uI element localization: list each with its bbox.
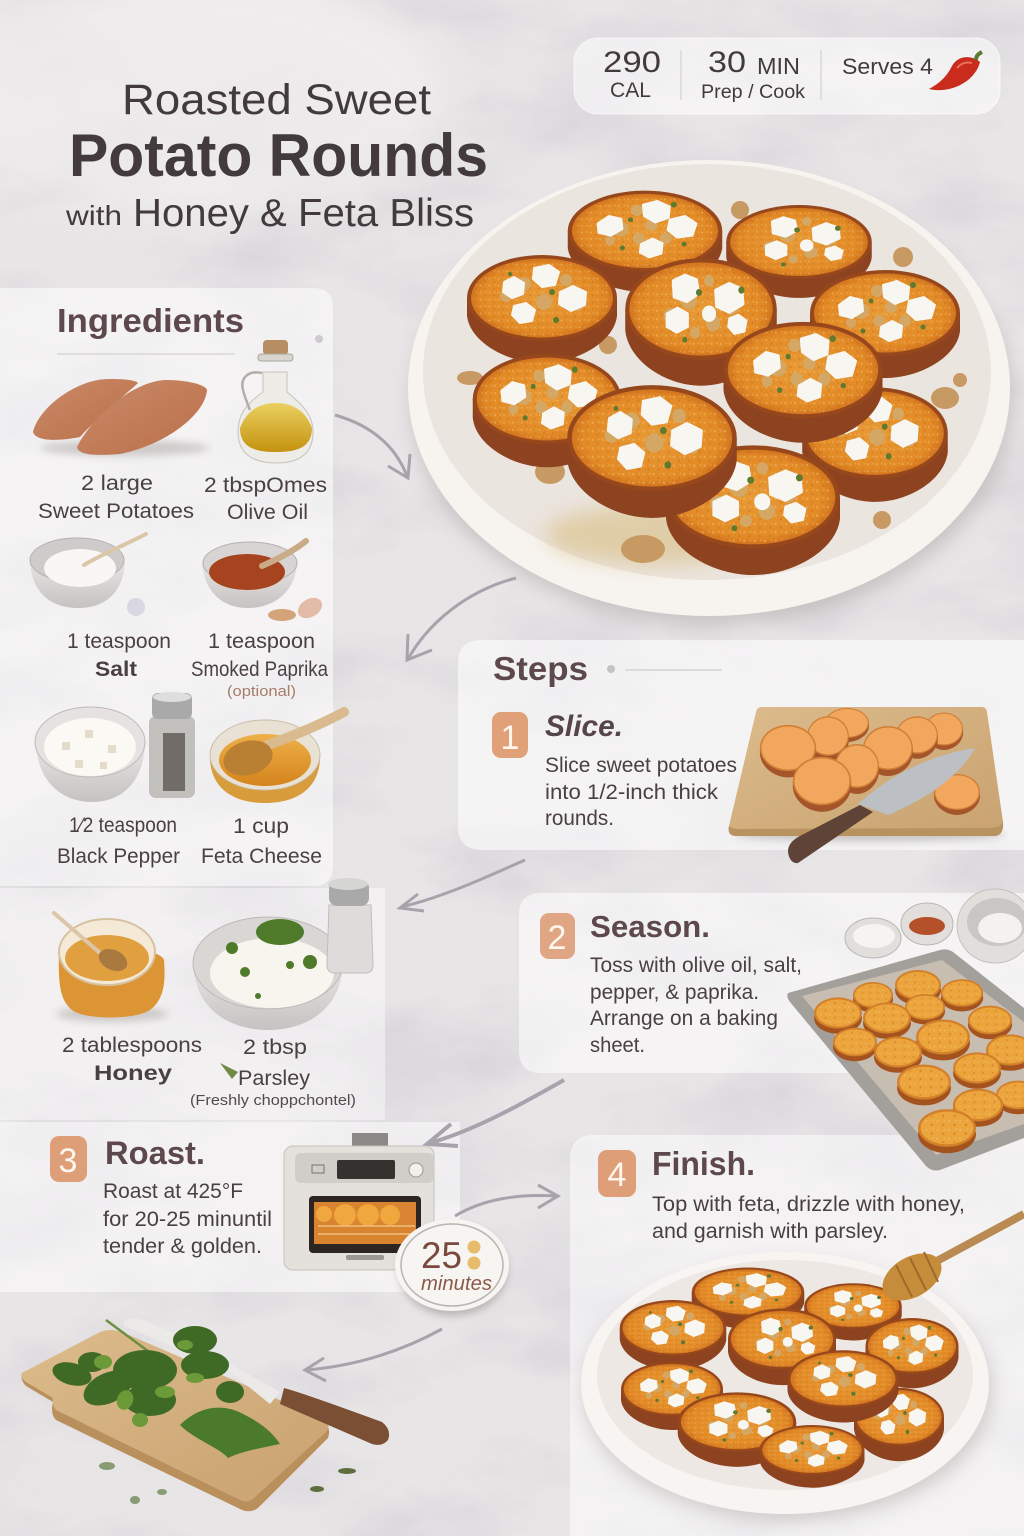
potato slices [760,708,980,815]
ingredient text: olive oil: Olive Oil [227,501,308,524]
ingredient text: feta cheese: Feta Cheese [201,845,322,868]
finished potato rounds [620,1267,958,1488]
step 2: season: pepper, & paprika. [590,981,759,1004]
step 4: finish: and garnish with parsley. [652,1220,888,1243]
step 2: season: sheet. [590,1034,645,1057]
step badge 4: 4 [608,1156,626,1194]
step badge 2: 2 [548,919,566,957]
ingredient text: smoked paprika [191,630,328,700]
knife [788,748,975,863]
stats bar [574,38,1000,114]
arrow: season to roast [427,1080,564,1146]
ingredient text: honey [62,1034,202,1085]
panel: roast [0,1122,460,1292]
timer badge: 25 [421,1235,462,1276]
arrow: finish to garnish [305,1329,442,1381]
steps heading: Steps [493,650,588,687]
title: Roasted Sweet [122,76,431,124]
step 2: season: Season. [590,909,710,944]
step 1: slice: Slice sweet potatoes [545,754,737,777]
baking sheet [787,949,1024,1170]
chopped parsley [180,1408,280,1458]
chef knife [124,1318,389,1445]
timer badge: minutes [421,1273,492,1295]
main plate [408,160,1012,624]
ingredient text: black pepper [57,814,180,868]
ingredient text: parsley: 2 tbsp [243,1036,307,1059]
arrow: slice to season [400,860,525,911]
baking sheet rounds [814,970,1024,1153]
ingredient text: sweet potatoes: Sweet Potatoes [38,500,194,523]
step 4: finish [598,1145,965,1243]
step badge 3 [50,1136,87,1182]
ingredient text: salt [67,630,171,681]
step 3: roast: Roast at 425°F [103,1180,243,1203]
step 2: season [540,909,802,1057]
step 3: roast: tender & golden. [103,1235,262,1258]
step 2: season: Toss with olive oil, salt, [590,954,802,977]
ingredients heading [57,302,323,354]
step 2: season: Arrange on a baking [590,1007,778,1030]
icon: salt shaker [327,878,373,973]
ingredient text: parsley: (Freshly choppchontel) [190,1092,356,1109]
title [65,76,488,235]
icon: olive oil bottle [238,340,313,463]
icon: honey bowl with dipper [210,712,344,803]
panel: steps slice [458,640,1024,850]
cutting board with slices [729,707,1005,863]
step 3: roast [50,1135,272,1258]
icon: sweet potatoes [33,379,210,456]
panel: ingredients [0,288,333,886]
panel: ingredients continued [0,888,385,1120]
step 1: slice: into 1/2-inch thick [545,781,719,804]
oven [284,1133,434,1270]
arrow: plate to steps [407,578,516,660]
icon: chili [929,52,982,90]
step 1: slice: Slice. [545,710,623,743]
stats bar: MIN [757,53,800,79]
finished plate [581,1252,992,1520]
step 3: roast: for 20-25 minuntil [103,1208,272,1231]
ingredient text: salt: Salt [95,658,137,681]
ingredient text: sweet potatoes: 2 large [81,472,153,495]
parsley [50,1320,280,1458]
ingredient text: salt: 1 teaspoon [67,630,171,653]
ingredient text: parsley [190,1036,356,1109]
step 1: slice: rounds. [545,807,614,830]
step 3: roast: Roast. [105,1135,205,1171]
ingredient text: smoked paprika: (optional) [227,683,296,700]
ingredient text: olive oil: 2 tbspOmes [204,474,327,497]
stats bar: Prep / Cook [701,82,806,103]
icon: feta bowl [35,707,145,802]
nuts on plate [457,201,967,563]
steps heading [493,650,722,687]
icon: salt bowl [30,534,146,616]
arrow: ingredients to plate [335,415,410,478]
ingredient text: honey: 2 tablespoons [62,1034,202,1057]
ingredient text: honey: Honey [94,1062,172,1085]
step badge 1: 1 [501,719,519,757]
ingredient text: black pepper: 1⁄2 teaspoon [69,814,177,837]
step badge 4 [598,1150,636,1197]
panel: finish [570,1135,1024,1536]
icon: paprika bowl [202,541,326,622]
ingredient text: black pepper: Black Pepper [57,845,180,868]
panel: season [519,893,1024,1073]
ingredient text: smoked paprika: 1 teaspoon [208,630,315,653]
ingredient text: feta cheese: 1 cup [233,815,289,838]
title: with [65,200,122,231]
ingredients heading: Ingredients [57,302,244,339]
ingredient text: olive oil [204,474,327,524]
arrow: roast to finish [455,1185,558,1216]
stats bar: Serves 4 [842,54,933,79]
timer badge [395,1219,509,1316]
title: Potato Rounds [69,122,488,189]
scattered parsley flakes [99,1462,356,1504]
stats bar: CAL [610,79,651,102]
potato rounds on main plate [467,191,960,575]
ingredient text: feta cheese [201,815,322,868]
step 1: slice [492,710,737,830]
step 4: finish: Top with feta, drizzle with honey, [652,1193,965,1216]
icon: honey jar [54,913,168,1022]
icon: pepper shaker [149,692,195,798]
title: Honey & Feta Bliss [133,192,474,235]
ingredient text: parsley: Parsley [238,1067,311,1090]
stats bar: 290 [603,46,661,79]
icon: feta and parsley bowl [193,917,343,1030]
ingredient text: smoked paprika: Smoked Paprika [191,658,328,681]
honey dipper [874,1214,1024,1310]
ingredient text: sweet potatoes [38,472,194,523]
step badge 1 [492,712,528,758]
stats bar: 30 [708,46,746,79]
step badge 3: 3 [59,1142,77,1180]
seasoning bowls [845,889,1024,963]
step badge 2 [540,913,575,959]
step 4: finish: Finish. [652,1145,755,1182]
parsley on cutting board [22,1318,389,1511]
